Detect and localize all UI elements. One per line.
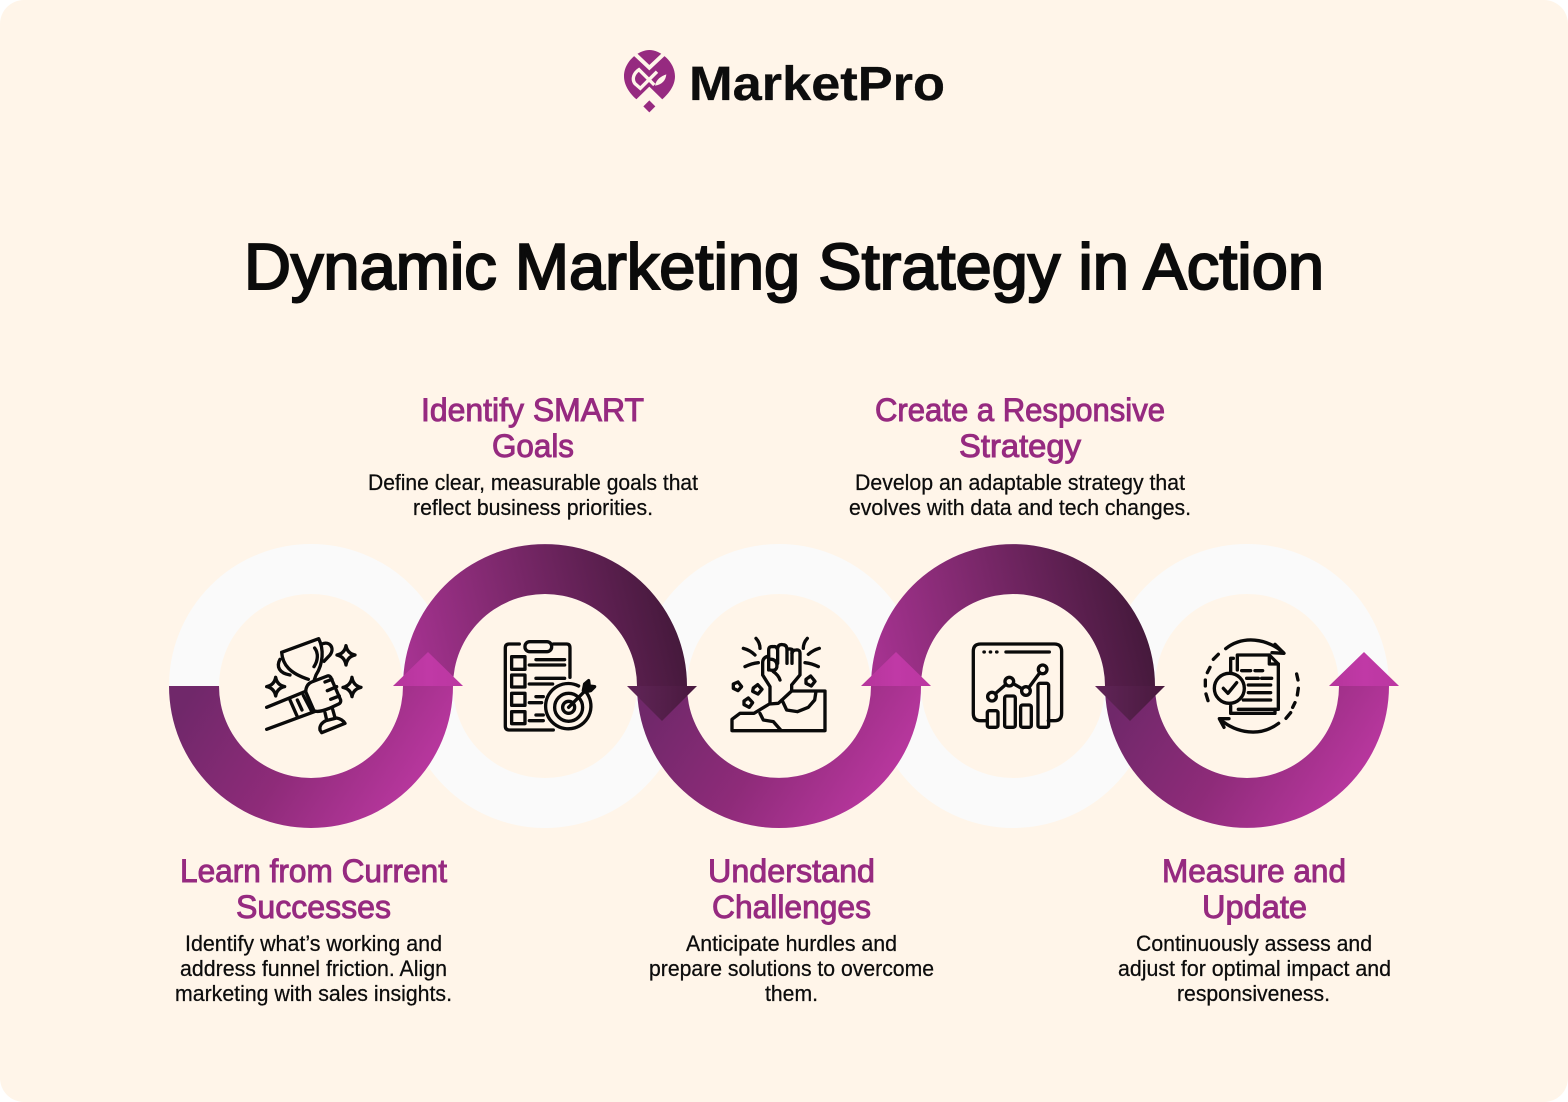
- heading: [180, 853, 447, 925]
- logo wordmark: MarketPro: [689, 58, 945, 111]
- description: responsiveness.: [1177, 981, 1330, 1006]
- description: Identify what’s working and: [185, 931, 442, 956]
- arrow head: up 3: [861, 652, 931, 686]
- icon: trophy in hand: [267, 639, 361, 733]
- icon: analytics dashboard: [973, 644, 1062, 727]
- arc: step 4: [871, 544, 1155, 686]
- description: [175, 931, 452, 1006]
- heading: Successes: [236, 889, 391, 925]
- heading: [875, 392, 1165, 464]
- description: prepare solutions to overcome: [649, 956, 934, 981]
- description: [849, 470, 1191, 520]
- logo: MarketPro: [624, 50, 945, 112]
- description: Develop an adaptable strategy that: [855, 470, 1185, 495]
- heading: Understand: [708, 853, 875, 889]
- heading: Update: [1202, 889, 1307, 925]
- heading: [1162, 853, 1346, 925]
- arc: step 2: [403, 544, 687, 686]
- icon: raised fist breaking through ground: [732, 638, 825, 731]
- arrow head: down 2: [627, 686, 697, 721]
- heading: Learn from Current: [180, 853, 447, 889]
- step 4 text: Create a Responsive Strategy: [849, 392, 1191, 520]
- step 5 text: Measure and Update: [1118, 853, 1391, 1006]
- heading: [708, 853, 875, 925]
- arrow head: down 4: [1095, 686, 1165, 721]
- description: reflect business priorities.: [413, 495, 653, 520]
- icon: checklist with target: [505, 642, 595, 730]
- description: [649, 931, 934, 1006]
- arc: step 3: [637, 686, 921, 828]
- description: [368, 470, 698, 520]
- step 2 text: Identify SMART Goals: [368, 392, 698, 520]
- heading: [421, 392, 644, 464]
- step 3 text: Understand Challenges: [649, 853, 934, 1006]
- heading: Challenges: [712, 889, 871, 925]
- description: Continuously assess and: [1136, 931, 1372, 956]
- description: Define clear, measurable goals that: [368, 470, 698, 495]
- icon: document review cycle: [1205, 640, 1298, 732]
- background light rings: [194, 569, 1364, 803]
- arc: step 5: [1105, 686, 1389, 828]
- icon: logo pin mark: [624, 50, 675, 112]
- description: evolves with data and tech changes.: [849, 495, 1191, 520]
- description: marketing with sales insights.: [175, 981, 452, 1006]
- process chain of linked rings: [169, 544, 1399, 828]
- description: address funnel friction. Align: [180, 956, 447, 981]
- description: [1118, 931, 1391, 1006]
- title: Dynamic Marketing Strategy in Action: [244, 230, 1324, 303]
- arrow head: up 1: [393, 652, 463, 686]
- description: Anticipate hurdles and: [686, 931, 897, 956]
- heading: Goals: [492, 428, 574, 464]
- description: them.: [765, 981, 818, 1006]
- heading: Create a Responsive: [875, 392, 1165, 428]
- heading: Measure and: [1162, 853, 1346, 889]
- step 1 text: Learn from Current Successes: [175, 853, 452, 1006]
- heading: Identify SMART: [421, 392, 644, 428]
- description: adjust for optimal impact and: [1118, 956, 1391, 981]
- heading: Strategy: [959, 428, 1081, 464]
- arrow head: up 5: [1329, 652, 1399, 686]
- arc: step 1: [169, 686, 453, 828]
